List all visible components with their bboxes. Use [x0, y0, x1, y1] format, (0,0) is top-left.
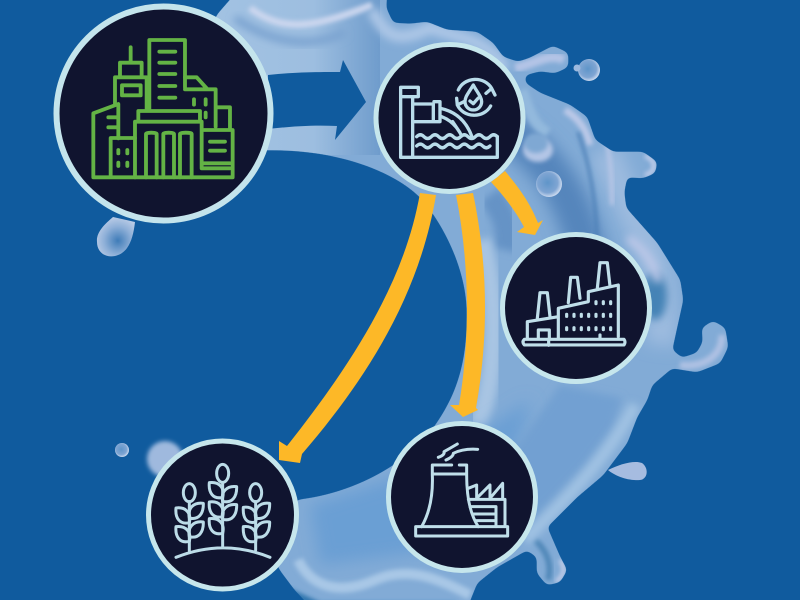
icon: wastewater pipe and recycling drop — [401, 79, 497, 157]
arrow: to crops — [279, 171, 543, 463]
bubble: top right — [578, 59, 600, 81]
icon: city buildings — [93, 40, 233, 177]
icon: factory — [523, 263, 625, 345]
node: water treatment — [376, 44, 523, 192]
drop: right — [608, 462, 647, 480]
node: factory — [502, 234, 650, 382]
water splash ring — [96, 0, 728, 600]
icon: cooling tower — [416, 444, 508, 536]
arrow cut-out: inflow arrow — [268, 60, 366, 140]
top rim highlight — [250, 5, 372, 24]
bubble: top right tiny — [574, 64, 580, 72]
node: power plant — [388, 424, 536, 570]
bubble: far left — [115, 443, 129, 457]
drop: lower left — [97, 217, 135, 256]
drop: beside crop circle — [147, 441, 183, 477]
node: city — [56, 6, 270, 220]
small hanging drop — [522, 90, 548, 133]
arrow: to power plant — [450, 193, 485, 417]
arrow: to factory — [491, 171, 543, 235]
splash fingers — [515, 57, 564, 68]
icon: crops — [176, 464, 270, 557]
lower rim — [298, 560, 470, 595]
right rim — [605, 150, 662, 345]
node: crops — [148, 441, 296, 589]
inner body shading — [509, 117, 610, 240]
bubble: inside splash — [536, 171, 562, 197]
